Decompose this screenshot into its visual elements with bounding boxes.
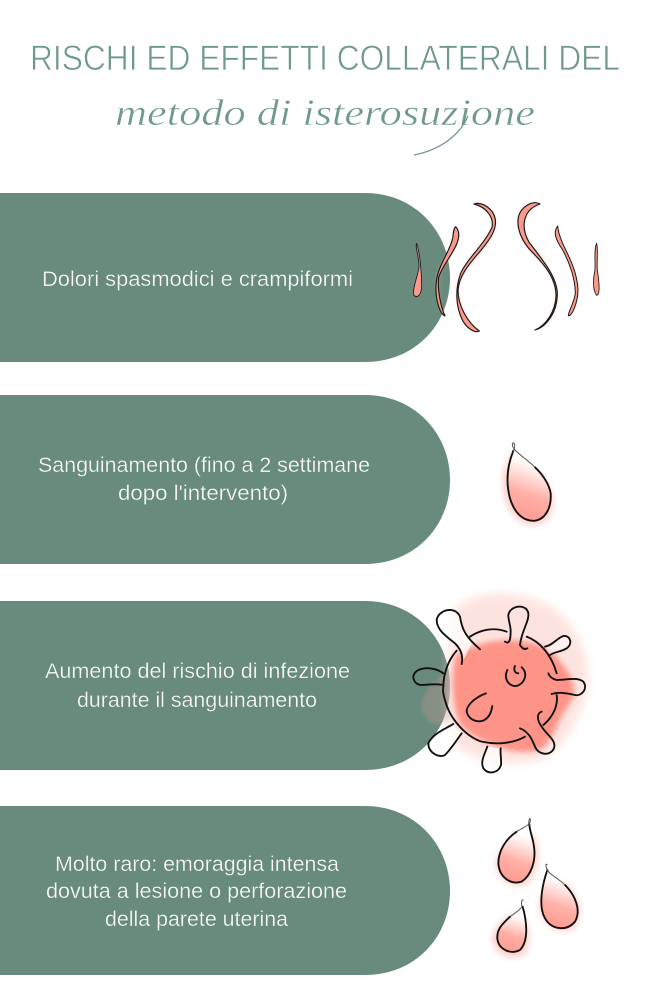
text: hemorrhage — [46, 853, 347, 931]
text: hemorrhage: Molto raro: emoraggia intensa — [55, 853, 339, 876]
text: bleeding: dopo l'intervento) — [118, 482, 288, 505]
panel: bleeding — [0, 395, 450, 564]
panel: hemorrhage — [0, 806, 450, 975]
text: bleeding: Sanguinamento (fino a 2 settimane — [38, 454, 370, 477]
text: infection — [45, 660, 350, 712]
title — [30, 39, 620, 155]
subtitle script — [115, 93, 535, 155]
icon: blood drop — [502, 443, 553, 525]
panel: cramps — [0, 193, 450, 362]
text: infection: Aumento del rischio di infezione — [45, 660, 350, 683]
text: cramps: Dolori spasmodici e crampiformi — [42, 268, 353, 291]
icon: virus — [413, 593, 588, 772]
text: hemorrhage: dovuta a lesione o perforazione — [46, 880, 347, 903]
icon: cramp waves — [414, 203, 599, 332]
text: infection: durante il sanguinamento — [77, 689, 317, 712]
text: hemorrhage: della parete uterina — [105, 908, 288, 931]
icon: three blood drops — [492, 818, 581, 958]
virus watercolor blotch — [422, 593, 588, 763]
subtitle script: metodo di isterosuzione — [115, 93, 535, 134]
panel: infection — [0, 601, 450, 770]
text: bleeding — [38, 454, 370, 505]
